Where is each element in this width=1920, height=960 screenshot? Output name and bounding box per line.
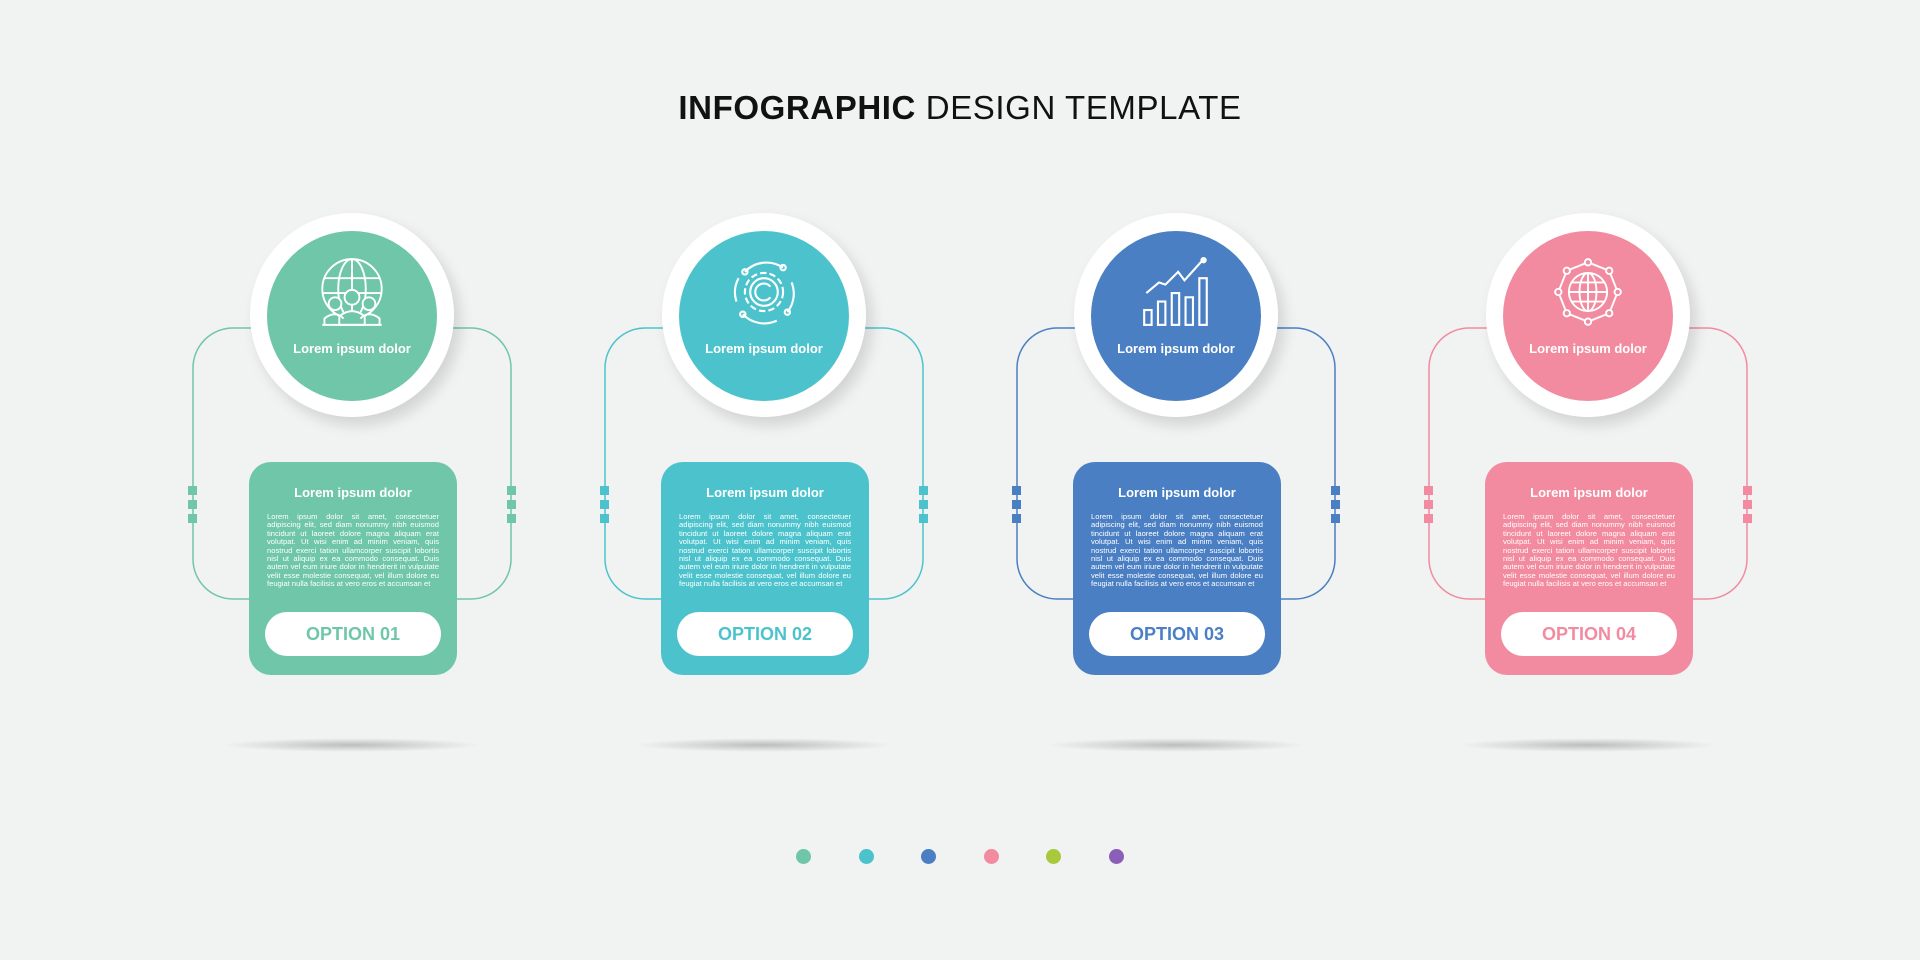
card: [1073, 462, 1281, 675]
card: [249, 462, 457, 675]
panel: option 01: [188, 213, 516, 751]
panel: option 02: [600, 213, 928, 751]
circle: [1091, 231, 1261, 401]
connector lines: [600, 327, 928, 600]
card: Lorem ipsum dolor: [1118, 485, 1236, 500]
panel: option 04: [1424, 213, 1752, 751]
card: OPTION 02: [718, 624, 812, 644]
circle: [267, 231, 437, 401]
card: [661, 462, 869, 675]
icon: bar chart: [1143, 257, 1208, 326]
icon: globe people: [321, 258, 383, 326]
icon: network globe: [1554, 258, 1622, 326]
connector lines: [1424, 327, 1752, 600]
card: Lorem ipsum dolor sit amet, consectetuer adipiscing elit, sed diam nonummy nibh euismod tincidunt ut laoreet dolore magna aliquam erat volutpat. Ut wisi enim ad minim veniam, quis nostrud exerci tation ullamcorper suscipit lobortis nisl ut aliquip ex ea commodo consequat. Duis autem vel eum iriure dolor in hendrerit in vulputate velit esse molestie consequat, vel illum dolore eu feugiat nulla facilisis at vero eros et accumsan et: [1091, 512, 1263, 588]
panel: option 03: [1012, 213, 1340, 751]
panel: option 03: Lorem ipsum dolor: [1117, 341, 1235, 356]
card: [1485, 462, 1693, 675]
panel: option 04: Lorem ipsum dolor: [1529, 341, 1647, 356]
colour dots: [796, 849, 1124, 864]
title: INFOGRAPHIC DESIGN TEMPLATE: [678, 89, 1242, 126]
card: Lorem ipsum dolor sit amet, consectetuer adipiscing elit, sed diam nonummy nibh euismod tincidunt ut laoreet dolore magna aliquam erat volutpat. Ut wisi enim ad minim veniam, quis nostrud exerci tation ullamcorper suscipit lobortis nisl ut aliquip ex ea commodo consequat. Duis autem vel eum iriure dolor in hendrerit in vulputate velit esse molestie consequat, vel illum dolore eu feugiat nulla facilisis at vero eros et accumsan et: [679, 512, 851, 588]
panel: option 01: Lorem ipsum dolor: [293, 341, 411, 356]
icon: gear: [734, 262, 795, 324]
circle: [679, 231, 849, 401]
card: Lorem ipsum dolor sit amet, consectetuer adipiscing elit, sed diam nonummy nibh euismod tincidunt ut laoreet dolore magna aliquam erat volutpat. Ut wisi enim ad minim veniam, quis nostrud exerci tation ullamcorper suscipit lobortis nisl ut aliquip ex ea commodo consequat. Duis autem vel eum iriure dolor in hendrerit in vulputate velit esse molestie consequat, vel illum dolore eu feugiat nulla facilisis at vero eros et accumsan et: [267, 512, 439, 588]
card: OPTION 01: [306, 624, 400, 644]
connector lines: [1012, 327, 1340, 600]
card: OPTION 04: [1542, 624, 1636, 644]
card: Lorem ipsum dolor sit amet, consectetuer adipiscing elit, sed diam nonummy nibh euismod tincidunt ut laoreet dolore magna aliquam erat volutpat. Ut wisi enim ad minim veniam, quis nostrud exerci tation ullamcorper suscipit lobortis nisl ut aliquip ex ea commodo consequat. Duis autem vel eum iriure dolor in hendrerit in vulputate velit esse molestie consequat, vel illum dolore eu feugiat nulla facilisis at vero eros et accumsan et: [1503, 512, 1675, 588]
card: Lorem ipsum dolor: [294, 485, 412, 500]
card: Lorem ipsum dolor: [1530, 485, 1648, 500]
connector lines: [188, 327, 516, 600]
circle: [1503, 231, 1673, 401]
panel: option 02: Lorem ipsum dolor: [705, 341, 823, 356]
card: Lorem ipsum dolor: [706, 485, 824, 500]
card: OPTION 03: [1130, 624, 1224, 644]
